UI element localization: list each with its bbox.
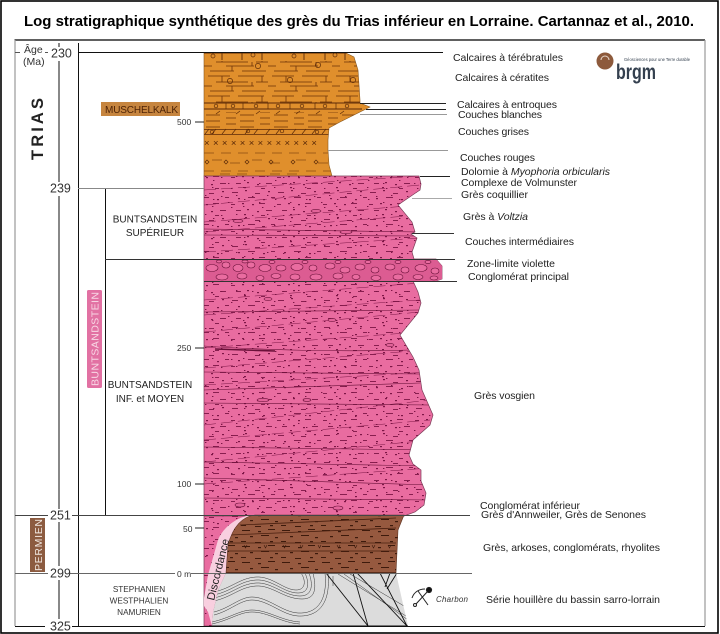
lithology labels: Conglomérat principal bbox=[468, 271, 569, 283]
lithology labels: Grès coquillier bbox=[461, 189, 528, 201]
icon: coal pickaxe bbox=[412, 587, 432, 606]
age scale: Âge bbox=[24, 43, 43, 56]
pink sandstone unit (Buntsandstein) bbox=[204, 176, 444, 626]
thickness scale: 0 m bbox=[177, 569, 191, 579]
age scale bbox=[23, 43, 72, 634]
Carboniferous stage labels: STEPHANIEN bbox=[113, 585, 165, 594]
unit label: Muschelkalk: MUSCHELKALK bbox=[105, 105, 178, 116]
age scale: 230 bbox=[51, 46, 72, 60]
sub-unit labels bbox=[108, 214, 197, 405]
thickness scale: 500 bbox=[177, 117, 191, 127]
Carboniferous stage labels bbox=[110, 585, 168, 617]
title: Log stratigraphique synthétique des grès du Trias inférieur en Lorraine. Cartannaz et al., 2010. bbox=[24, 14, 694, 30]
sub-unit labels: BUNTSANDSTEIN bbox=[108, 380, 192, 391]
lithology labels: Grès vosgien bbox=[474, 390, 535, 402]
coal label: Charbon bbox=[436, 595, 469, 604]
Carboniferous stage labels: NAMURIEN bbox=[117, 608, 161, 617]
thickness scale: 50 bbox=[183, 524, 193, 534]
thickness scale bbox=[177, 117, 204, 579]
age scale: 251 bbox=[50, 508, 71, 522]
lithology labels: Grès, arkoses, conglomérats, rhyolites bbox=[483, 542, 660, 554]
thickness scale: 100 bbox=[177, 479, 191, 489]
orange limestone unit (Muschelkalk) bbox=[204, 53, 370, 176]
age scale: 239 bbox=[50, 182, 71, 196]
age scale: 325 bbox=[50, 620, 71, 634]
lithology labels: Zone-limite violette bbox=[467, 258, 555, 270]
lithology labels: Couches grises bbox=[458, 126, 529, 138]
thickness scale: 250 bbox=[177, 343, 191, 353]
lithology labels bbox=[453, 52, 660, 606]
lithology labels: Calcaires à cératites bbox=[455, 72, 549, 84]
lithology labels: Grès d'Annweiler, Grès de Senones bbox=[481, 509, 646, 521]
orange limestone unit (Muschelkalk): ××××××××××××× bbox=[204, 138, 320, 149]
sub-unit labels: SUPÉRIEUR bbox=[126, 226, 184, 239]
grey coal basin unit bbox=[212, 573, 408, 626]
lithology labels: Grès à Voltzia bbox=[463, 211, 528, 223]
lithology labels: Série houillère du bassin sarro-lorrain bbox=[486, 594, 660, 606]
sub-unit labels: INF. et MOYEN bbox=[116, 394, 184, 405]
discordance band bbox=[204, 515, 255, 626]
lithology labels: Complexe de Volmunster bbox=[461, 177, 578, 189]
Carboniferous stage labels: WESTPHALIEN bbox=[110, 596, 168, 606]
lithology labels: Couches intermédiaires bbox=[465, 236, 574, 248]
age scale: 299 bbox=[50, 566, 71, 580]
unit label: Buntsandstein: BUNTSANDSTEIN bbox=[90, 292, 102, 386]
lithology labels: Conglomérat inférieur bbox=[480, 500, 580, 512]
era label: Trias: TRIAS bbox=[29, 98, 47, 160]
BRGM logo: Géosciences pour une Terre durable bbox=[624, 57, 690, 62]
lithology labels: Couches rouges bbox=[460, 152, 535, 164]
age scale: (Ma) bbox=[23, 56, 45, 68]
brown Permian unit bbox=[220, 515, 404, 573]
BRGM logo bbox=[596, 52, 690, 84]
discordance band: Discordance bbox=[205, 538, 232, 602]
lithology labels: Couches blanches bbox=[458, 109, 542, 121]
lithology labels: Calcaires à entroques bbox=[457, 99, 557, 111]
era label: Permien: PERMIEN bbox=[33, 519, 45, 571]
lithology labels: Dolomie à Myophoria orbicularis bbox=[461, 166, 611, 178]
sub-unit labels: BUNTSANDSTEIN bbox=[113, 214, 197, 226]
BRGM logo: brgm bbox=[616, 61, 656, 84]
lithology labels: Calcaires à térébratules bbox=[453, 52, 563, 64]
